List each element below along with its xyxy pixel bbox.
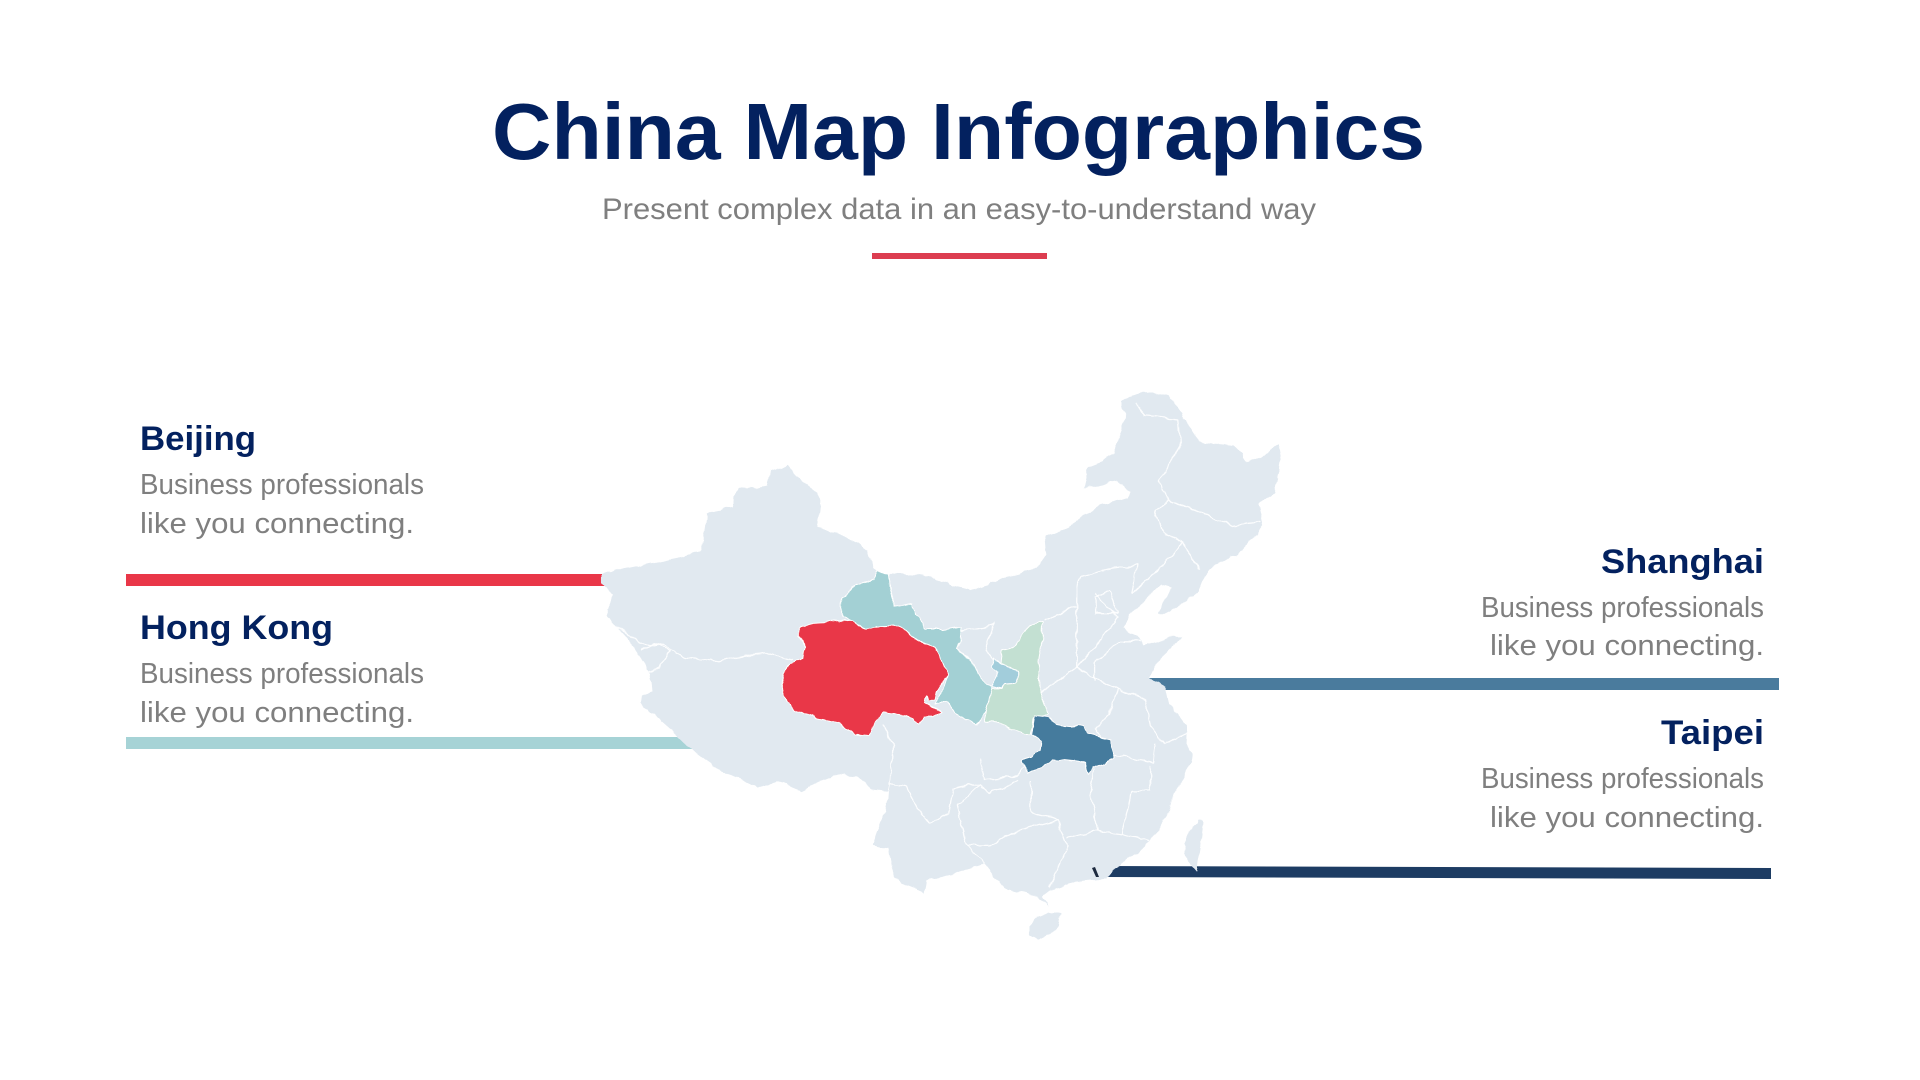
callout: Taipei [1481,714,1764,834]
title accent rule [872,253,1047,259]
connector bar: Taipei [1106,866,1771,879]
province: Gansu [842,571,992,725]
Taipei connector end mark [1092,867,1099,877]
description: Business professionals [140,658,424,690]
description: Business professionals [140,469,424,501]
connector bar: Beijing [126,574,616,586]
base map landmass [601,393,1281,939]
heading: Beijing [140,420,256,458]
description: Business professionals [1481,592,1764,624]
province: Shaanxi [984,622,1048,735]
description [140,658,424,729]
title: China Map Infographics [492,87,1425,176]
description: Business professionals [1481,763,1764,795]
icon: Taiwan island [1184,820,1203,871]
description [140,469,424,540]
connector bar: Shanghai [1140,678,1779,690]
description: like you connecting. [1490,802,1764,834]
callout: Shanghai [1481,543,1764,662]
province boundary lines [618,402,1260,889]
description [1481,592,1764,662]
heading: Hong Kong [140,609,333,647]
heading: Taipei [1661,714,1764,752]
province: Ningxia [992,658,1017,688]
province: Qinghai [782,620,948,737]
description: like you connecting. [140,697,414,729]
province: Hubei [1020,715,1116,773]
highlighted provinces [782,571,1116,773]
subtitle: Present complex data in an easy-to-understand way [602,193,1316,226]
map of China [601,393,1281,939]
description: like you connecting. [1490,630,1764,662]
icon: Hainan island [1029,913,1061,939]
callout: Hong Kong [140,609,424,729]
connector bar: Hong Kong [126,737,706,749]
description [1481,763,1764,834]
callout: Beijing [140,420,424,540]
heading: Shanghai [1601,543,1764,581]
description: like you connecting. [140,508,414,540]
